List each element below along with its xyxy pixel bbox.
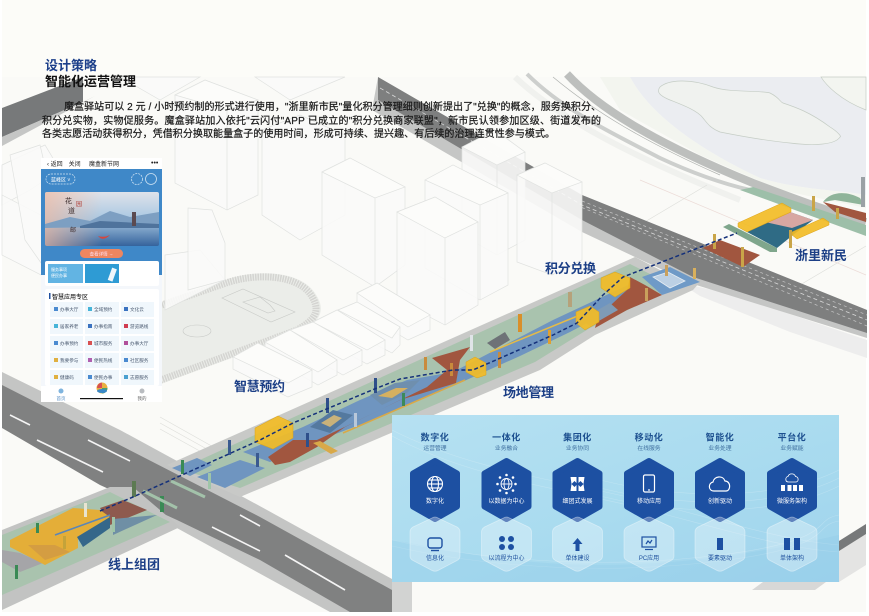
island outlines [658, 81, 841, 145]
phone app grid: 智慧应用专区 [52, 293, 88, 301]
column: 数字化: 数字化 [421, 432, 449, 442]
column: 数字化: 信息化 [426, 554, 444, 562]
low bar blocks [357, 283, 430, 340]
road at panel lower right [752, 524, 866, 590]
body text: 魔盒驿站可以 2 元 / 小时预约制的形式进行使用，"浙里新市民"量化积分管理细则创新提出了"兑换"的概念，服务换积分、 [64, 100, 601, 113]
column: 移动化: PC应用 [639, 554, 659, 562]
phone app grid: 我要参与 [60, 357, 79, 364]
column: 集团化: 集团化 [563, 432, 592, 442]
column: 移动化: 移动应用 [637, 497, 661, 505]
phone orange button: 查看详情 → [90, 250, 113, 258]
phone app grid: 文化云 [130, 306, 144, 313]
panel: digital transformation [392, 415, 839, 582]
dashed route [100, 233, 737, 511]
label: 积分兑换: 积分兑换 [545, 261, 596, 276]
phone banner: 园 [76, 201, 82, 208]
label: 线上组团: 线上组团 [108, 557, 160, 572]
phone banner: 邮 [70, 226, 76, 234]
column: 一体化: 业务融合 [495, 444, 518, 452]
phone header: ‹ 返回 关闭 [47, 160, 81, 168]
column: 移动化: 移动化 [635, 432, 663, 442]
column: 移动化 [624, 432, 674, 571]
phone service card [45, 261, 159, 286]
phone service card: 服务事项 [51, 266, 67, 272]
curved expressway [567, 74, 866, 222]
phone app grid: 办事指南 [94, 323, 113, 330]
column: 集团化 [552, 432, 602, 571]
site 浙里新民 garden [703, 177, 866, 267]
phone bottom nav: 首页 [56, 395, 66, 402]
corridor base [167, 257, 700, 497]
phone app grid: 办事大厅 [60, 306, 79, 313]
tower group [462, 130, 525, 255]
column: 平台化: 微服务架构 [777, 497, 807, 505]
phone app grid: 游览路线 [130, 323, 149, 330]
top-left dark road [2, 77, 83, 137]
section label: 设计策略 [45, 58, 97, 73]
phone app grid [45, 289, 159, 386]
column: 移动化: 在线服务 [637, 444, 661, 452]
column: 智能化 [695, 432, 745, 571]
phone app grid: 居家养老 [60, 323, 79, 330]
linear park corridor [167, 257, 700, 497]
column: 智能化: 创新驱动 [708, 497, 732, 505]
phone app grid: 健康码 [60, 374, 74, 381]
column: 集团化: 单体建设 [565, 554, 590, 562]
column: 智能化: 智能化 [706, 432, 734, 442]
column: 一体化: 以流程为中心 [488, 554, 525, 562]
phone app grid: 城市服务 [94, 340, 113, 347]
corridor totems [228, 265, 696, 467]
checker paving [2, 550, 43, 572]
column: 一体化: 以数据为中心 [488, 497, 525, 505]
column: 一体化 [482, 432, 532, 571]
brown paths [268, 347, 470, 465]
column: 智能化: 要素驱动 [708, 554, 732, 562]
label: 浙里新民: 浙里新民 [795, 248, 847, 263]
top band [2, 0, 866, 77]
phone header: ••• [151, 160, 159, 167]
green riverside strip [740, 187, 866, 236]
column: 平台化: 平台化 [778, 432, 806, 442]
phone location pill: 蓝峰区 ˅ [51, 176, 70, 184]
body text: 各类志愿活动获得积分，凭借积分换取能量盒子的使用时间，形成可持续、提兴趣、有后续的治理连贯性参与模式。 [42, 127, 555, 140]
phone app grid: 志愿服务 [130, 374, 149, 381]
title: 智能化运营管理 [45, 74, 136, 89]
phone header [41, 158, 162, 169]
yellow paths [313, 441, 338, 454]
phone banner [45, 192, 159, 246]
column: 数字化: 数字化 [426, 497, 444, 505]
phone bottom nav: 我的 [138, 395, 147, 402]
column: 平台化 [767, 432, 817, 571]
body text: 积分兑实物，实物促服务。魔盒驿站加入依托"云闪付"APP 已成立的"积分兑换商家联盟"，新市民认领参加区级、街道发布的 [42, 114, 601, 127]
phone app grid: 办事预约 [60, 340, 79, 347]
phone banner: 花 [65, 196, 72, 205]
column: 集团化: 业务协同 [566, 444, 589, 452]
road stripes beside panel [392, 582, 412, 612]
column: 数字化 [410, 432, 460, 571]
column: 数字化: 运营管理 [423, 444, 447, 452]
column: 智能化: 业务处理 [708, 444, 732, 452]
phone blue background [41, 169, 162, 275]
water body [630, 77, 866, 195]
yellow pavilions [255, 203, 829, 449]
column: 平台化: 业务赋能 [780, 444, 804, 452]
thin ground lines [160, 180, 866, 465]
body text [42, 100, 601, 140]
phone app grid: 便民办事 [94, 374, 113, 381]
main road east [372, 77, 867, 358]
phone app grid: 全域预约 [94, 306, 113, 313]
phone bottom nav [41, 382, 162, 402]
cross road south-west [2, 372, 412, 612]
column: 一体化: 一体化 [492, 432, 521, 442]
column: 集团化: 细团式发展 [562, 497, 593, 505]
phone app grid: 便民热线 [94, 357, 113, 364]
phone orange button [80, 249, 123, 258]
phone banner: 道 [68, 206, 75, 215]
dark roofed pavilion [487, 332, 510, 349]
phone location pill [46, 174, 156, 184]
site 线上组团 ground [2, 460, 211, 610]
label: 智慧预约: 智慧预约 [234, 379, 285, 394]
label: 场地管理: 场地管理 [503, 385, 554, 400]
phone mockup [41, 158, 162, 402]
stadium [150, 273, 321, 388]
phone app grid: 社区服务 [130, 357, 149, 364]
phone header: 魔盒新节网 [89, 160, 119, 168]
context buildings [2, 77, 582, 397]
phone service card: 便民办事 [51, 272, 67, 278]
phone app grid: 办事大厅 [130, 340, 149, 347]
blue plazas [243, 285, 640, 462]
column: 平台化: 单体架构 [780, 554, 804, 562]
